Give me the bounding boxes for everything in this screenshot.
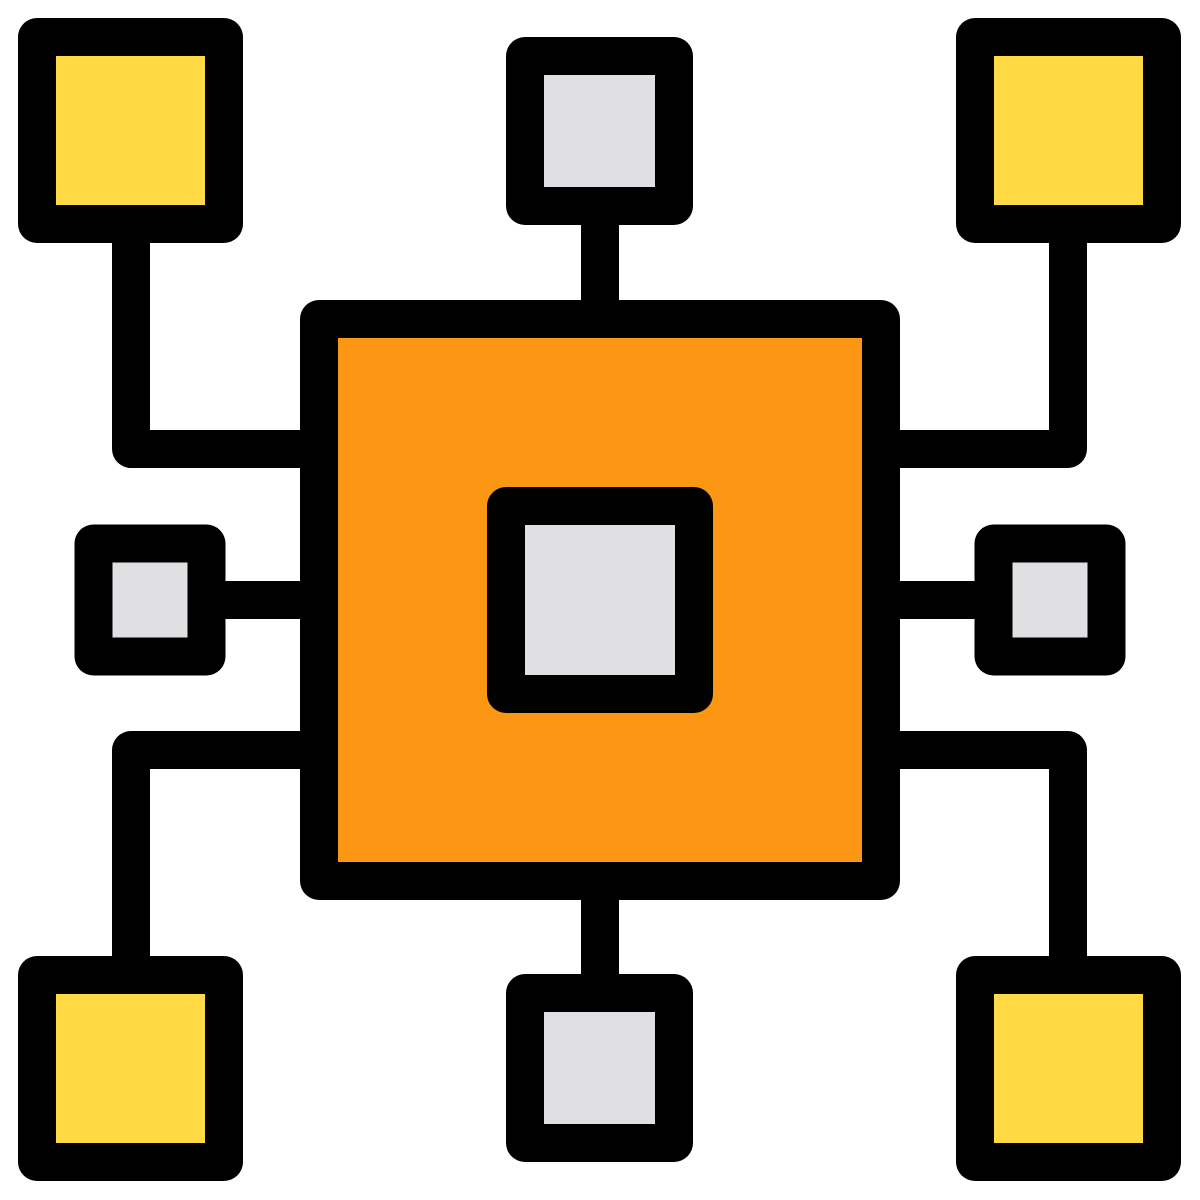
node: right gray xyxy=(994,544,1106,656)
node: top-right yellow xyxy=(975,37,1162,224)
connector lines xyxy=(131,206,1068,993)
node: top-left yellow xyxy=(37,37,224,224)
node: bottom-right yellow xyxy=(975,975,1162,1162)
node: bottom-left yellow xyxy=(37,975,224,1162)
node: top-center gray xyxy=(525,56,674,206)
node: bottom-center gray xyxy=(525,993,674,1143)
central hub xyxy=(319,319,881,881)
node: left gray xyxy=(94,544,206,656)
